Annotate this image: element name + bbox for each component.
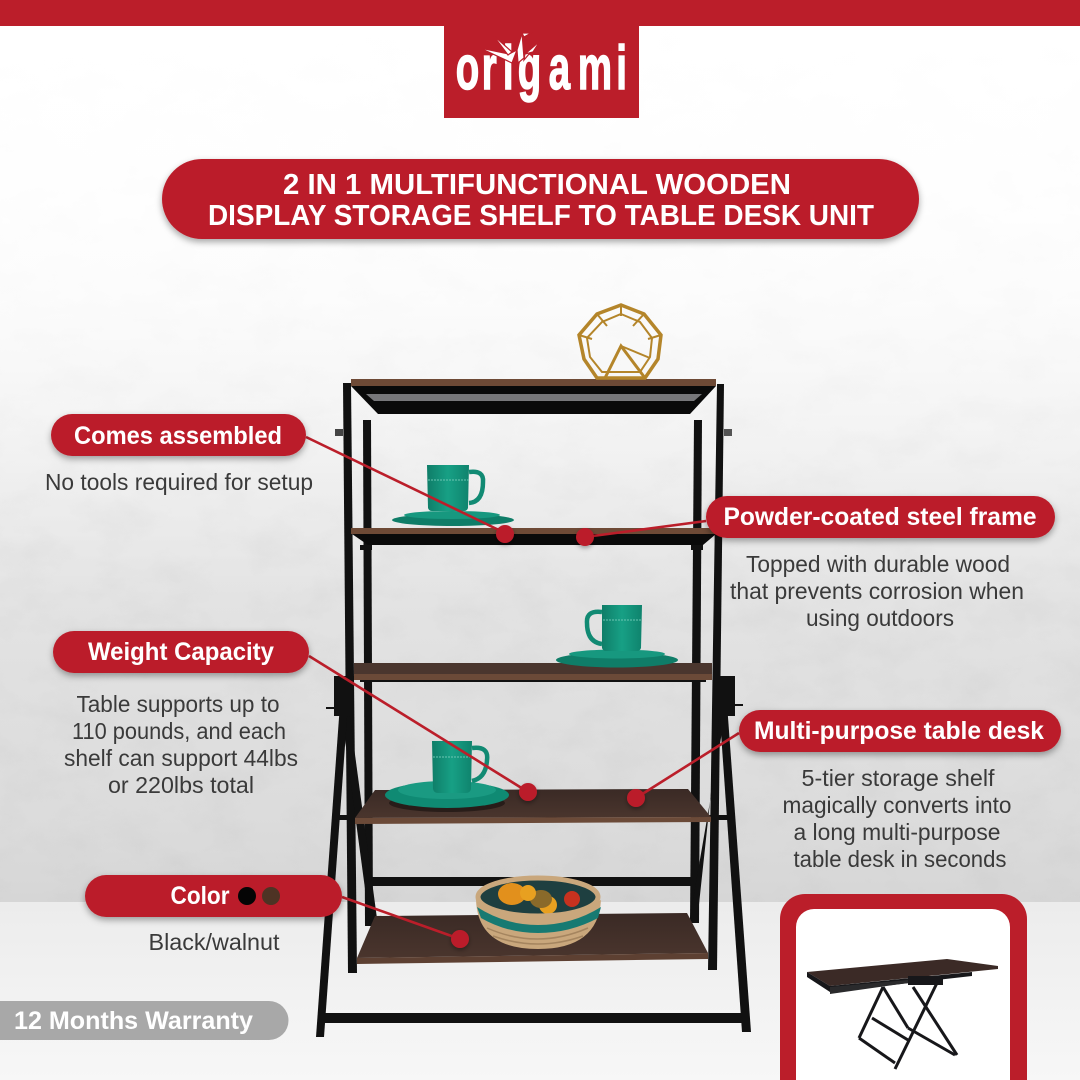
title text: 2 IN 1 MULTIFUNCTIONAL WOODEN: [283, 169, 791, 201]
inset: table desk mode: [780, 894, 1027, 1080]
text: weight details: [64, 691, 298, 798]
text: topped with durable wood: using outdoors: [806, 605, 954, 631]
title pill: [162, 159, 919, 239]
text: weight details: 110 pounds, and each: [72, 718, 286, 744]
text: 5-tier storage: table desk in seconds: [794, 846, 1006, 872]
title text: [208, 169, 874, 232]
callout: powder-coated steel frame: [706, 496, 1055, 538]
callout lines and dots: [306, 437, 739, 948]
shelf 3: [354, 663, 712, 682]
text: 5-tier storage: a long multi-purpose: [794, 819, 1000, 845]
mug and plates on shelf 2: [392, 465, 514, 526]
shelf 4: [355, 789, 711, 824]
warranty text: 12 Months Warranty: [14, 1007, 253, 1035]
callout heading: Multi-purpose table desk: [754, 717, 1044, 745]
text: weight details: Table supports up to: [76, 691, 280, 717]
top shelf: [351, 379, 716, 414]
text: black/walnut: Black/walnut: [148, 929, 280, 955]
shelf 5: [357, 913, 708, 964]
text: topped with durable wood: Topped with durable wood: [746, 551, 1010, 577]
callout: comes assembled: [51, 414, 306, 456]
text: no tools: No tools required for setup: [45, 469, 313, 495]
callout: weight capacity: [53, 631, 309, 673]
shelf 2: [351, 528, 716, 545]
gold geometric ornament: [579, 305, 661, 378]
text: 5-tier storage: [782, 765, 1012, 872]
callout: multi-purpose table desk: [739, 710, 1061, 752]
product photo: folding shelf unit: [316, 305, 751, 1037]
swatch: walnut: [262, 887, 280, 905]
text: topped with durable wood: that prevents corrosion when: [730, 578, 1024, 604]
text: weight details: shelf can support 44lbs: [64, 745, 298, 771]
logo: origami: [444, 26, 639, 118]
callout heading: Comes assembled: [74, 422, 282, 450]
frame: legs and posts: [316, 383, 751, 1037]
text: 5-tier storage: 5-tier storage shelf: [802, 765, 995, 791]
callout heading: Color: [170, 882, 230, 910]
text: 5-tier storage: magically converts into: [782, 792, 1012, 818]
woven basket with fruit: [476, 878, 601, 949]
callout heading: Powder-coated steel frame: [724, 503, 1037, 531]
text: topped with durable wood: [730, 551, 1024, 631]
logo wordmark: origami: [456, 33, 627, 102]
callout heading: Weight Capacity: [88, 638, 274, 666]
table illustration: [807, 959, 998, 1069]
title text: DISPLAY STORAGE SHELF TO TABLE DESK UNIT: [208, 200, 874, 232]
text: weight details: or 220lbs total: [108, 772, 254, 798]
icon: paper crane: [480, 33, 540, 63]
mug and plates on shelf 3: [556, 605, 678, 668]
swatch: black: [238, 887, 256, 905]
mug and plates on shelf 4: [385, 741, 509, 812]
top red band: [0, 0, 1080, 26]
warranty pill: [0, 1001, 288, 1040]
callout: color: [85, 875, 342, 917]
